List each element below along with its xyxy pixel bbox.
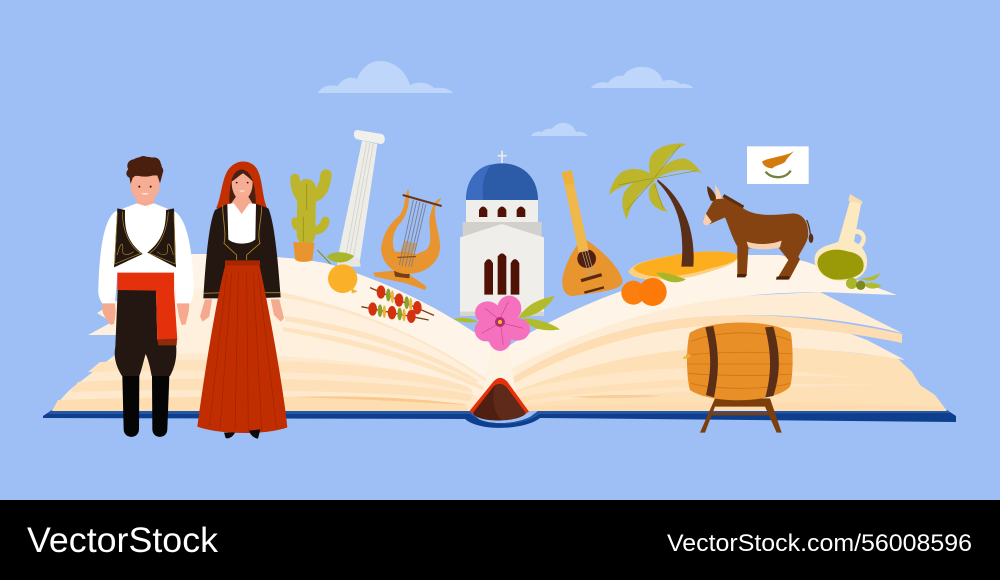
woman in traditional costume — [197, 162, 287, 439]
hands — [102, 303, 189, 325]
neck and face — [137, 195, 154, 206]
palm tree on sand island — [609, 144, 738, 280]
open book — [43, 254, 956, 428]
pink flower with leaves — [453, 296, 560, 351]
shirt — [98, 203, 194, 304]
cloud: upper right — [591, 67, 693, 88]
red headscarf — [216, 162, 267, 208]
church windows — [484, 253, 519, 295]
shoes — [224, 429, 260, 439]
skewers — [361, 285, 434, 323]
sash — [117, 273, 177, 340]
lemon with leaf — [317, 250, 358, 293]
jacket — [203, 204, 281, 298]
right pages — [500, 292, 947, 411]
skirt — [197, 265, 287, 433]
neck — [230, 197, 253, 215]
left top page — [190, 254, 502, 388]
donkey — [703, 185, 813, 280]
cactus in pot — [293, 175, 326, 262]
church body — [460, 224, 544, 316]
belt — [225, 260, 260, 265]
watermark bar — [0, 500, 1000, 580]
church with blue dome — [460, 151, 544, 316]
wine barrel on stand — [683, 323, 793, 433]
greek column — [337, 130, 385, 267]
watermark url text: VectorStock.com/56008596 — [667, 530, 972, 557]
hands — [200, 299, 284, 322]
mandolin — [561, 170, 623, 296]
man in traditional costume — [98, 156, 194, 437]
trousers — [115, 290, 176, 376]
cross — [498, 151, 507, 163]
book cover — [43, 410, 956, 428]
olive oil bottle with olives — [814, 194, 882, 290]
cyprus flag — [747, 146, 809, 184]
lyre — [373, 189, 442, 290]
curly hair — [126, 156, 163, 184]
blouse — [227, 203, 256, 244]
oranges — [621, 273, 686, 306]
roof band — [463, 222, 542, 237]
hair — [229, 169, 256, 203]
book spine — [469, 378, 529, 420]
right top page — [500, 255, 897, 375]
boots — [122, 376, 169, 437]
cloud: large left — [318, 61, 453, 93]
left pages — [52, 254, 502, 411]
vest — [114, 208, 176, 267]
gold trim — [203, 205, 281, 293]
face — [232, 173, 253, 200]
bell tower — [466, 200, 538, 222]
dome — [466, 163, 538, 200]
watermark logo text: VectorStock — [27, 521, 219, 560]
eyes and mouth — [236, 182, 249, 184]
cloud: small centre — [531, 123, 588, 136]
centre fold — [484, 345, 516, 392]
